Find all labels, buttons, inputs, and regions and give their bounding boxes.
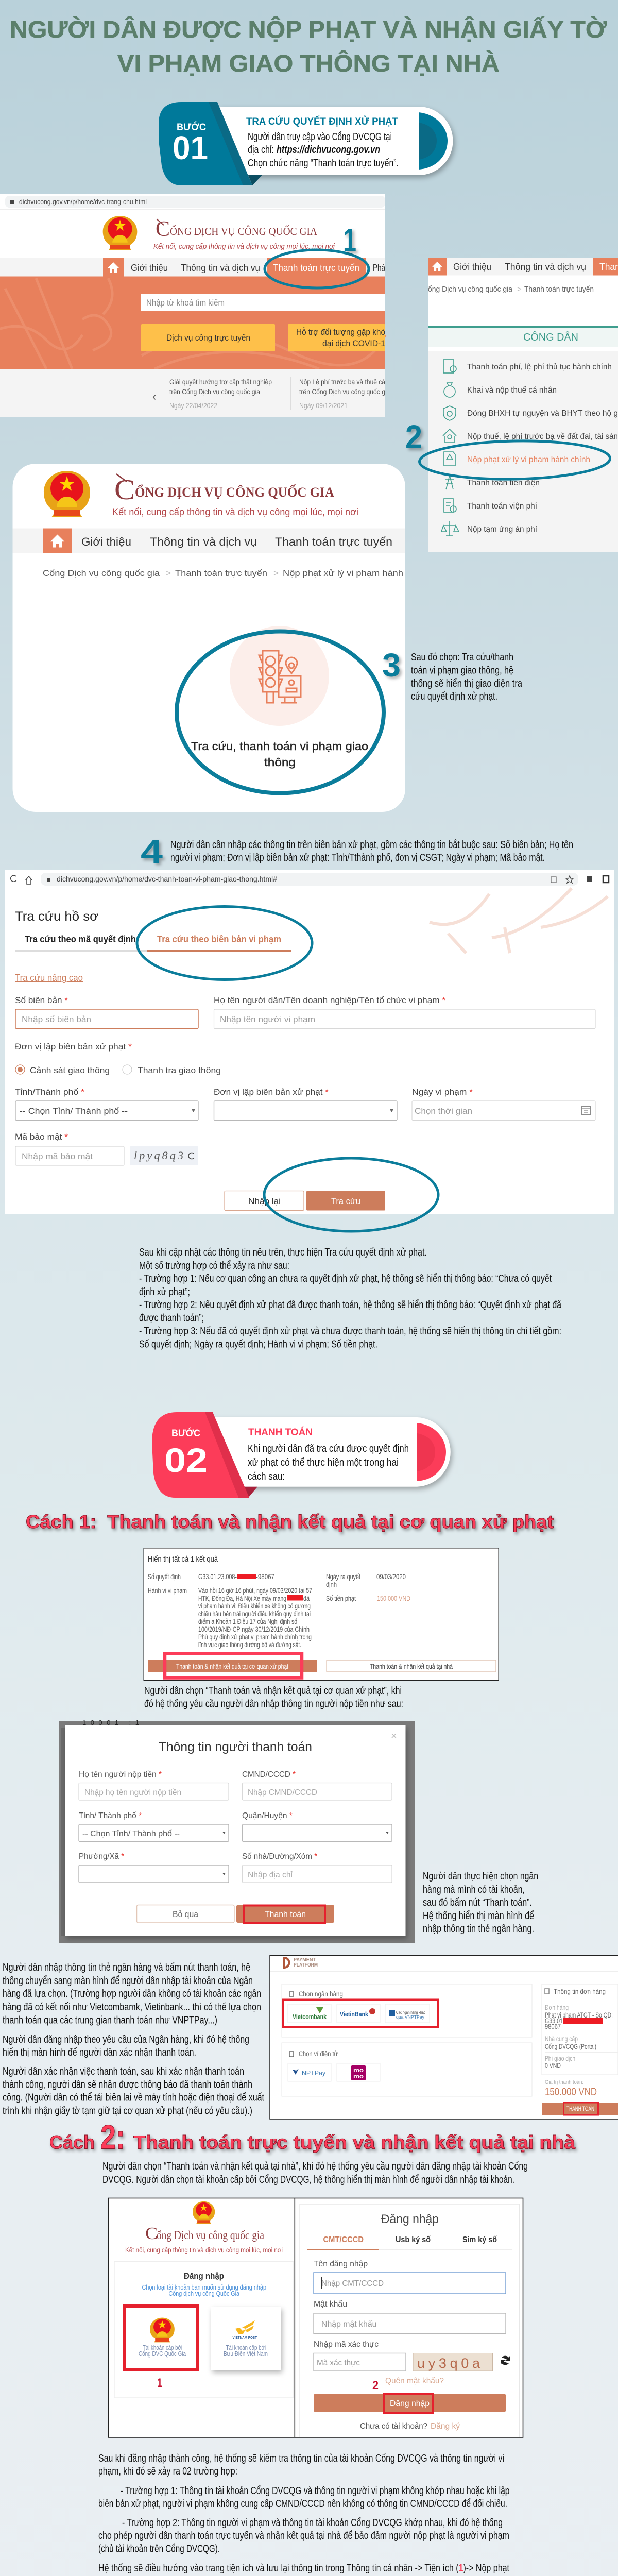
- service list: Thanh toán tiền điện: [467, 479, 540, 487]
- panel: payer info modal: CMND/CCCD *: [242, 1770, 296, 1779]
- tabs: Tra cứu nâng cao: [15, 973, 83, 983]
- login form: Nhập CMT/CCCD: [321, 2279, 384, 2288]
- wallet box: mo: [353, 2073, 364, 2080]
- text: card payment notes: Người dân đăng nhập theo yêu cầu của Ngân hàng, khi đó hệ thống: [3, 2034, 249, 2045]
- panel: login screenshots: [108, 2198, 523, 2437]
- panel: screenshot search form: [5, 870, 614, 1214]
- login account chooser: Cổng DVC Quốc Gia: [139, 2350, 186, 2358]
- login form: u y 3 q 0 a: [417, 2355, 480, 2371]
- breadcrumb: >: [273, 568, 279, 578]
- wallet box: Chọn ví điện tử: [299, 2050, 338, 2058]
- orange banner: Hỗ trợ đối tượng gặp khó: [296, 327, 385, 337]
- service list: Nộp tạm ứng án phí: [467, 525, 538, 534]
- form fields: Thanh tra giao thông: [138, 1065, 221, 1075]
- panel: step 01 banner: BƯỚC: [177, 122, 206, 133]
- text: card payment notes: trình khi nhận giấy tờ tạm giữ tại cơ quan xử phạt (nếu có yêu cầu).): [3, 2105, 252, 2116]
- form fields: Chọn thời gian: [415, 1106, 472, 1116]
- orange banner: [0, 276, 385, 369]
- buttons: Thanh toán & nhận kết quả tại nhà: [370, 1663, 453, 1670]
- panel: screenshot result: điểm a Khoản 1 Điều 17 của Nghị định số: [198, 1618, 297, 1625]
- callout ring and number 2: [405, 418, 610, 481]
- text: card payment notes: hàng đã có kết nối như Vietcombamk, Vietinbank... thì có thể lựa chọn: [3, 2002, 261, 2013]
- panel: screenshot service list: CÔNG DÂN: [523, 331, 578, 343]
- text: login result cases: [98, 2453, 510, 2576]
- text: card payment notes: thành công, người dân sẽ nhận được thông báo đã thanh toán thành: [3, 2079, 252, 2091]
- buttons: Thanh toán: [265, 1909, 306, 1919]
- panel: step 01 banner: [159, 102, 453, 185]
- text: login result cases: - Trường hợp 2: Thông tin người vi phạm và thông tin tài khoản Cổng DVCQG khớp nhau, khi đó hệ thống: [122, 2517, 503, 2529]
- text: login result cases: Hệ thống sẽ điều hướng vào trang tiện ích và lưu lại thông tin trong Thông tin cá nhân -> Tiện ích (1)-> Nộp phạt: [98, 2563, 509, 2574]
- text: login result cases: (chủ tài khoản trên Cổng DVCQG).: [98, 2543, 220, 2554]
- login account chooser: VIETNAM POST: [233, 2336, 258, 2340]
- form fields: Đơn vị lập biên bản xử phạt *: [214, 1087, 329, 1097]
- buttons: Thanh toán & nhận kết quả tại cơ quan xử phạt: [176, 1663, 288, 1670]
- orange banner: Nhập từ khoá tìm kiếm: [146, 298, 225, 308]
- icon: emblem: [193, 2201, 215, 2224]
- text: step 3: toán vi phạm giao thông, hệ: [411, 665, 513, 676]
- bank box: [282, 1984, 532, 2037]
- portal name: ỔNG DỊCH VỤ CÔNG QUỐC GIA: [135, 485, 334, 500]
- text: login result cases: Sau khi đăng nhập thành công, hệ thống sẽ kiểm tra thông tin của tài khoản Cổng DVCQG và thông tin người vi: [98, 2453, 504, 2464]
- login form: Usb ký số: [396, 2235, 431, 2244]
- panel: payer info modal: -- Chọn Tỉnh/ Thành phố --: [82, 1829, 180, 1838]
- heading: cách 2: 2:: [100, 2117, 125, 2156]
- login form: Nhập mã xác thực: [314, 2340, 379, 2349]
- panel: screenshot service list: >: [517, 285, 522, 294]
- panel: step 02 banner: cách sau:: [248, 1471, 285, 1482]
- panel: screenshot service list: ổng Dịch vụ công quốc gia: [428, 285, 513, 294]
- title: VI PHẠM GIAO THÔNG TẠI NHÀ: [117, 50, 500, 77]
- buttons: Tra cứu: [331, 1196, 360, 1206]
- portal name: [112, 474, 358, 518]
- login form: Nhập mật khẩu: [321, 2319, 377, 2329]
- panel: screenshot result: Vào hồi 16 giờ 16 phút, ngày 09/03/2020 tại 57: [198, 1587, 312, 1595]
- browser bar: [5, 873, 614, 888]
- panel: screenshot search form: Tra cứu hồ sơ: [15, 909, 98, 924]
- text: search results cases: [139, 1247, 562, 1350]
- panel: payment platform screenshot: [270, 1956, 618, 2119]
- portal name: Kết nối, cung cấp thông tin và dịch vụ công mọi lúc, mọi nơi: [112, 507, 358, 518]
- panel: step 02 banner: BƯỚC: [171, 1428, 200, 1439]
- login form: Mật khẩu: [314, 2299, 347, 2309]
- panel: screenshot result: Số tiền phạt: [326, 1595, 356, 1602]
- panel: screenshot result: G33.01.23.008-: [198, 1573, 237, 1581]
- form fields: -- Chọn Tỉnh/ Thành phố --: [20, 1106, 128, 1116]
- service list: Thanh toán viện phí: [467, 502, 538, 511]
- panel: screenshot result: Hiển thị tất cả 1 kết quả: [148, 1555, 218, 1564]
- text: search results cases: Một số trường hợp có thể xảy ra như sau:: [139, 1260, 289, 1272]
- order info: Nhà cung cấp: [545, 2035, 578, 2043]
- wallet box: NPTPay: [302, 2069, 325, 2077]
- panel: step 02 banner: 02: [164, 1441, 208, 1479]
- portal name: C: [114, 474, 135, 506]
- heading: cách 2: [49, 2117, 576, 2156]
- panel: screenshot service list: Giới thiệu: [453, 262, 491, 272]
- panel: step 01 banner: Chọn chức năng “Thanh toán trực tuyến”.: [248, 158, 399, 169]
- panel: payer info modal: Nhập CMND/CCCD: [248, 1788, 317, 1797]
- text: step 3: cứu quyết định xử phạt.: [411, 691, 497, 702]
- buttons: [225, 1191, 385, 1211]
- navigation bar: Giới thiệu: [131, 263, 168, 273]
- form fields: Nhập tên người vi phạm: [220, 1014, 315, 1024]
- portal name: [125, 2224, 283, 2254]
- news strip: Giải quyết hướng trợ cấp thất nghiệp: [169, 378, 272, 386]
- login form: Sim ký số: [462, 2235, 497, 2244]
- breadcrumb: >: [166, 568, 171, 578]
- heading: cách 2: Thanh toán trực tuyến và nhận kết quả tại nhà: [133, 2132, 576, 2153]
- login account chooser: Bưu Điện Việt Nam: [224, 2350, 268, 2358]
- text: card payment notes: [3, 1962, 264, 2116]
- text: step 3: [411, 652, 523, 702]
- panel: screenshot result: vi phạm hành vi: Điều khiển xe không có gương: [198, 1602, 311, 1610]
- form fields: Nhập số biên bản: [22, 1014, 91, 1024]
- panel: screenshot home page: dichvucong.gov.vn/p/home/dvc-trang-chu.html: [19, 198, 147, 206]
- text: cách 2 intro: [102, 2161, 528, 2185]
- buttons: [137, 1905, 334, 1923]
- navigation bar: Thanh toán trực tuyến: [273, 263, 359, 273]
- text: choose bank: Hệ thống hiển thị màn hình để: [423, 1910, 534, 1922]
- icon: emblem: [103, 216, 137, 250]
- icon: traffic light: [259, 651, 301, 703]
- bank box: Các ngân hàng khác: [396, 2010, 425, 2015]
- callout ring: tab: [137, 907, 312, 980]
- panel: screenshot service list: Thanh toán trực tuyến: [524, 285, 594, 294]
- login account chooser: [114, 2262, 294, 2398]
- icons: service list: [441, 360, 459, 536]
- panel: screenshot result: định: [326, 1581, 337, 1588]
- breadcrumb: [43, 568, 403, 578]
- panel: screenshot result: 150.000 VND: [377, 1595, 410, 1602]
- breadcrumb: Nộp phạt xử lý vi phạm hành: [283, 568, 403, 578]
- navigation bar: [0, 258, 386, 276]
- service list: [467, 363, 618, 534]
- form fields: Cảnh sát giao thông: [30, 1065, 110, 1075]
- text: step 3: Sau đó chọn: Tra cứu/thanh: [411, 652, 513, 663]
- form fields: Ngày vi phạm *: [412, 1087, 473, 1097]
- navigation bar: Thông tin và dịch vụ: [181, 263, 260, 273]
- panel: screenshot result: [144, 1548, 499, 1681]
- login form: CMT/CCCD: [323, 2235, 364, 2244]
- news strip: trên Cổng Dịch vụ công quốc g: [299, 387, 385, 396]
- service label: thông: [264, 756, 296, 769]
- login account chooser: Chọn loại tài khoản bạn muốn sử dụng đăng nhập: [142, 2283, 266, 2291]
- callout ring: search button: [264, 1158, 438, 1231]
- panel: screenshot result: lĩnh vực giao thông đường bộ và đường sắt.: [198, 1641, 301, 1649]
- text: cách 1 intro: [144, 1685, 403, 1709]
- panel: screenshot result: 100/2019/NĐ-CP ngày 30/12/2019 của Chính: [198, 1625, 310, 1633]
- panel: payer info modal: ×: [391, 1731, 397, 1742]
- form fields: l p y q 8 q 3: [134, 1149, 183, 1162]
- form fields: Mã bảo mật *: [15, 1132, 68, 1142]
- buttons: [148, 1660, 496, 1672]
- panel: payer info modal: 10001 :1: [82, 1719, 139, 1726]
- navigation bar: Thông tin và dịch vụ: [150, 535, 257, 548]
- portal name: [153, 217, 335, 251]
- panel: screenshot result: Phủ quy định xử phạt vi phạm hành chính trong: [198, 1633, 312, 1641]
- tabs: Tra cứu theo biên bản vi phạm: [157, 934, 281, 944]
- login form: Đăng nhập: [390, 2399, 430, 2408]
- text: card payment notes: thống chuyển sang màn hình để người dân nhập tài khoản của Ngân: [3, 1975, 253, 1987]
- service list: Thanh toán phí, lệ phí thủ tục hành chính: [467, 363, 612, 371]
- text: search results cases: Số quyết định; Ngày ra quyết định; Hành vi vi phạm; Số tiền phạt.: [139, 1338, 377, 1350]
- form fields: [15, 995, 595, 1165]
- order info: Phí giao dịch: [545, 2055, 575, 2062]
- text: login result cases: cho phép người dân thanh toán trực tuyến và nhận kết quả tại nhà để bảo đảm người nộp phạt là người vi phạm: [98, 2530, 509, 2541]
- panel: payer info modal: Phường/Xã *: [79, 1852, 124, 1861]
- portal name: Kết nối, cung cấp thông tin và dịch vụ công mọi lúc, mọi nơi: [125, 2246, 283, 2254]
- news strip: Ngày 09/12/2021: [299, 401, 348, 410]
- text: cách 1 intro: đó hệ thống yêu cầu người dân nhập thông tin người nộp tiền như sau:: [144, 1698, 403, 1709]
- login form: [300, 2204, 519, 2437]
- login form: Đăng nhập: [381, 2212, 439, 2226]
- panel: step 01 banner: 01: [173, 129, 208, 166]
- browser bar: dichvucong.gov.vn/p/home/dvc-thanh-toan-vi-pham-giao-thong.html#: [57, 875, 277, 883]
- order info: Thông tin đơn hàng: [554, 1988, 606, 1995]
- number 3: 3: [382, 647, 401, 684]
- text: card payment notes: thanh toán qua các trung gian thanh toán như VNPTPay...): [3, 2014, 217, 2026]
- panel: payer info modal: Họ tên người nộp tiền *: [79, 1770, 162, 1779]
- panel: payer info modal: Nhập địa chỉ: [248, 1871, 293, 1879]
- service label: Tra cứu, thanh toán vi phạm giao: [191, 740, 368, 753]
- text: search results cases: được thanh toán”;: [139, 1313, 204, 1324]
- text: step 3: thống sẽ hiển thị giao diện tra: [411, 678, 523, 689]
- portal name: ỔNG DỊCH VỤ CÔNG QUỐC GIA: [170, 225, 318, 238]
- decorative birds: [430, 888, 608, 953]
- order info: G33.01: [545, 2017, 563, 2025]
- order info: 0 VND: [545, 2062, 561, 2070]
- text: login result cases: - Trường hợp 1: Thông tin tài khoản Cổng DVCQG và thông tin người vi phạm không khớp nhau hoặc khi lập: [121, 2485, 510, 2497]
- panel: payer info modal: Tỉnh/ Thành phố *: [79, 1811, 142, 1820]
- login account chooser: Cổng dịch vụ công Quốc Gia: [169, 2290, 240, 2297]
- panel: step 02 banner: THANH TOÁN: [248, 1427, 313, 1438]
- panel: payer info modal: Nhập họ tên người nộp tiền: [84, 1788, 181, 1797]
- order info: 150.000 VND: [545, 2086, 597, 2098]
- order info: 98067: [545, 2023, 561, 2030]
- icon: emblem: [44, 471, 90, 517]
- service label: [191, 740, 368, 769]
- logo: payment platform: PAYMENT: [294, 1957, 316, 1963]
- orange banner: Dịch vụ công trực tuyến: [166, 333, 250, 343]
- panel: screenshot result: 09/03/2020: [376, 1573, 406, 1581]
- logo: payment platform: [284, 1957, 318, 1969]
- news strip: trên Cổng Dịch vụ công quốc gia: [169, 387, 260, 396]
- login form: Chưa có tài khoản?: [360, 2422, 427, 2431]
- panel: screenshot service list: Thông tin và dịch vụ: [505, 262, 586, 272]
- panel: payer info modal: Quận/Huyện *: [242, 1811, 293, 1820]
- form fields: Tỉnh/Thành phố *: [15, 1087, 84, 1097]
- service list: Khai và nộp thuế cá nhân: [467, 386, 557, 395]
- news strip: ‹: [152, 390, 156, 403]
- icon: emblem: [150, 2318, 175, 2342]
- text: card payment notes: hiển thị màn hình để người dân xác nhận thanh toán.: [3, 2047, 196, 2058]
- breadcrumb: Thanh toán trực tuyến: [175, 568, 267, 578]
- text: step 4: [170, 839, 573, 863]
- panel: screenshot service list: Thar: [599, 262, 618, 272]
- login form: 2: [372, 2379, 379, 2393]
- order info: Cổng DVCQG (Portal): [545, 2043, 596, 2050]
- login form: Quên mật khẩu?: [385, 2376, 444, 2385]
- tabs: [15, 934, 291, 983]
- login form: Đăng ký: [431, 2422, 460, 2431]
- portal name: Kết nối, cung cấp thông tin và dịch vụ công mọi lúc, mọi nơi: [153, 242, 335, 251]
- text: search results cases: Sau khi cập nhật các thông tin nêu trên, thực hiện Tra cứu quyết định xử phạt.: [139, 1247, 427, 1258]
- text: cách 1 intro: Người dân chọn “Thanh toán và nhận kết quả tại cơ quan xử phạt”, khi: [144, 1685, 402, 1697]
- heading: cách 1: Cách 1: Thanh toán và nhận kết quả tại cơ quan xử phạt: [26, 1511, 554, 1532]
- tabs: Tra cứu theo mã quyết định: [25, 934, 136, 944]
- title: [10, 16, 607, 77]
- panel: screenshot result: chiếu hậu bên trái người điều khiển quy định tại: [198, 1610, 311, 1618]
- panel: screenshot home page: [0, 194, 386, 417]
- form fields: Nhập mã bảo mật: [22, 1151, 93, 1161]
- panel: screenshot result: HTK, Đống Đa, Hà Nội Xe máy mang: [198, 1595, 286, 1602]
- panel: step 02 banner: [152, 1412, 451, 1498]
- panel: screenshot result: Ngày ra quyết: [326, 1573, 360, 1581]
- text: choose bank: Người dân thực hiện chọn ngân: [423, 1871, 538, 1882]
- callout ring and number 1: 1: [343, 222, 356, 259]
- wallet box: [282, 2043, 532, 2096]
- form fields: Số biên bản *: [15, 995, 68, 1005]
- orange banner: đại dịch COVID-1: [322, 338, 385, 348]
- panel: screenshot result: Hành vi vi phạm: [148, 1587, 187, 1595]
- portal name: C: [156, 217, 170, 241]
- buttons: Nhập lại: [248, 1196, 281, 1206]
- navigation bar: Giới thiệu: [81, 535, 131, 548]
- text: choose bank: sau đó bấm nút “Thanh toán”.: [423, 1897, 532, 1908]
- panel: screenshot tra cứu: [12, 464, 405, 812]
- login account chooser: Tài khoản cấp bởi: [143, 2344, 182, 2351]
- portal name: C: [145, 2224, 158, 2243]
- form fields: Đơn vị lập biên bản xử phạt *: [15, 1042, 132, 1052]
- text: login result cases: biên bản xử phạt, người vi phạm không cung cấp CMND/CCCD nên không có thông tin CMND/CCCD để đối chiếu.: [98, 2498, 507, 2510]
- wallet box: mo: [353, 2066, 364, 2074]
- text: search results cases: định xử phạt”;: [139, 1286, 190, 1298]
- bank box: Chọn ngân hàng: [299, 1990, 343, 1998]
- text: choose bank: nhập thông tin thẻ ngân hàng.: [423, 1923, 534, 1935]
- text: choose bank: [423, 1871, 538, 1935]
- news strip: Nộp Lệ phí trước bạ và thuế cá: [299, 378, 385, 386]
- bank box: VietinBank: [340, 2010, 369, 2018]
- panel: step 01 banner: TRA CỨU QUYẾT ĐỊNH XỬ PHẠT: [246, 116, 398, 127]
- order info: [542, 1984, 618, 2115]
- logo: payment platform: PLATFORM: [294, 1962, 318, 1968]
- panel: screenshot result: -98067: [256, 1573, 274, 1581]
- panel: step 02 banner: xử phạt có thể thực hiện một trong hai: [248, 1457, 399, 1468]
- panel: step 01 banner: Người dân truy cập vào Cổng DVCQG tại: [248, 131, 392, 143]
- number 4: 4: [141, 833, 163, 870]
- navigation bar: [12, 529, 405, 553]
- text: card payment notes: Người dân xác nhận việc thanh toán, sau khi xác nhận thanh toán: [3, 2066, 244, 2077]
- heading: cách 2: Cách: [49, 2132, 95, 2153]
- login form: Mã xác thực: [317, 2359, 360, 2367]
- text: login result cases: phạm, khi đó sẽ xảy ra 02 trường hợp:: [98, 2466, 237, 2477]
- news strip: Ngày 22/04/2022: [169, 401, 217, 410]
- form fields: Họ tên người dân/Tên doanh nghiệp/Tên tổ chức vi phạm *: [214, 995, 445, 1005]
- text: card payment notes: Người dân nhập thông tin thẻ ngân hàng và bấm nút thanh toán, hệ: [3, 1962, 250, 1973]
- navigation bar: Phá: [373, 263, 386, 273]
- panel: step 01 banner: https://dichvucong.gov.vn: [277, 144, 380, 156]
- login account chooser: Tài khoản cấp bởi: [226, 2344, 266, 2351]
- order info: Đơn hàng: [545, 2004, 569, 2011]
- panel: screenshot result: Số quyết định: [148, 1573, 181, 1581]
- bank box: Vietcombank: [293, 2013, 327, 2021]
- panel: payer info modal: Số nhà/Đường/Xóm *: [242, 1852, 317, 1861]
- callout ring and number 2: 2: [405, 418, 422, 455]
- breadcrumb: Cổng Dịch vụ công quốc gia: [43, 568, 160, 578]
- login account chooser: Đăng nhập: [184, 2271, 224, 2281]
- news strip: [0, 369, 385, 417]
- panel: screenshot result: đã: [303, 1595, 310, 1602]
- text: card payment notes: công. (Người dân có thể tải biên lai về máy tính hoặc điện thoại để xuất: [3, 2092, 264, 2103]
- title: NGƯỜI DÂN ĐƯỢC NỘP PHẠT VÀ NHẬN GIẤY TỜ: [10, 16, 607, 43]
- callout ring and number 1: [265, 222, 369, 288]
- navigation bar: Thanh toán trực tuyến: [275, 535, 392, 548]
- bank box: qua VNPTPay: [396, 2015, 424, 2020]
- text: card payment notes: hàng đã lựa chọn. (Trường hợp người dân không có tài khoản các ngân: [3, 1988, 261, 1999]
- text: choose bank: hàng mà mình có tài khoản,: [423, 1884, 525, 1895]
- panel: payer info modal: [59, 1719, 415, 1943]
- order info: Giá trị thanh toán:: [545, 2079, 583, 2086]
- panel: payer info modal: Thông tin người thanh toán: [159, 1740, 312, 1754]
- panel: step 01 banner: địa chỉ:: [248, 144, 274, 156]
- order info: THANH TOÁN: [566, 2105, 594, 2112]
- login account chooser: 1: [157, 2376, 162, 2390]
- buttons: Bỏ qua: [173, 1909, 198, 1919]
- portal name: ổng Dịch vụ công quốc gia: [157, 2229, 264, 2242]
- service list: Nộp phạt xử lý vi phạm hành chính: [467, 455, 590, 464]
- panel: screenshot service list: [428, 258, 618, 552]
- panel: step 02 banner: Khi người dân đã tra cứu được quyết định: [248, 1443, 409, 1454]
- login form: Tên đăng nhập: [314, 2260, 368, 2268]
